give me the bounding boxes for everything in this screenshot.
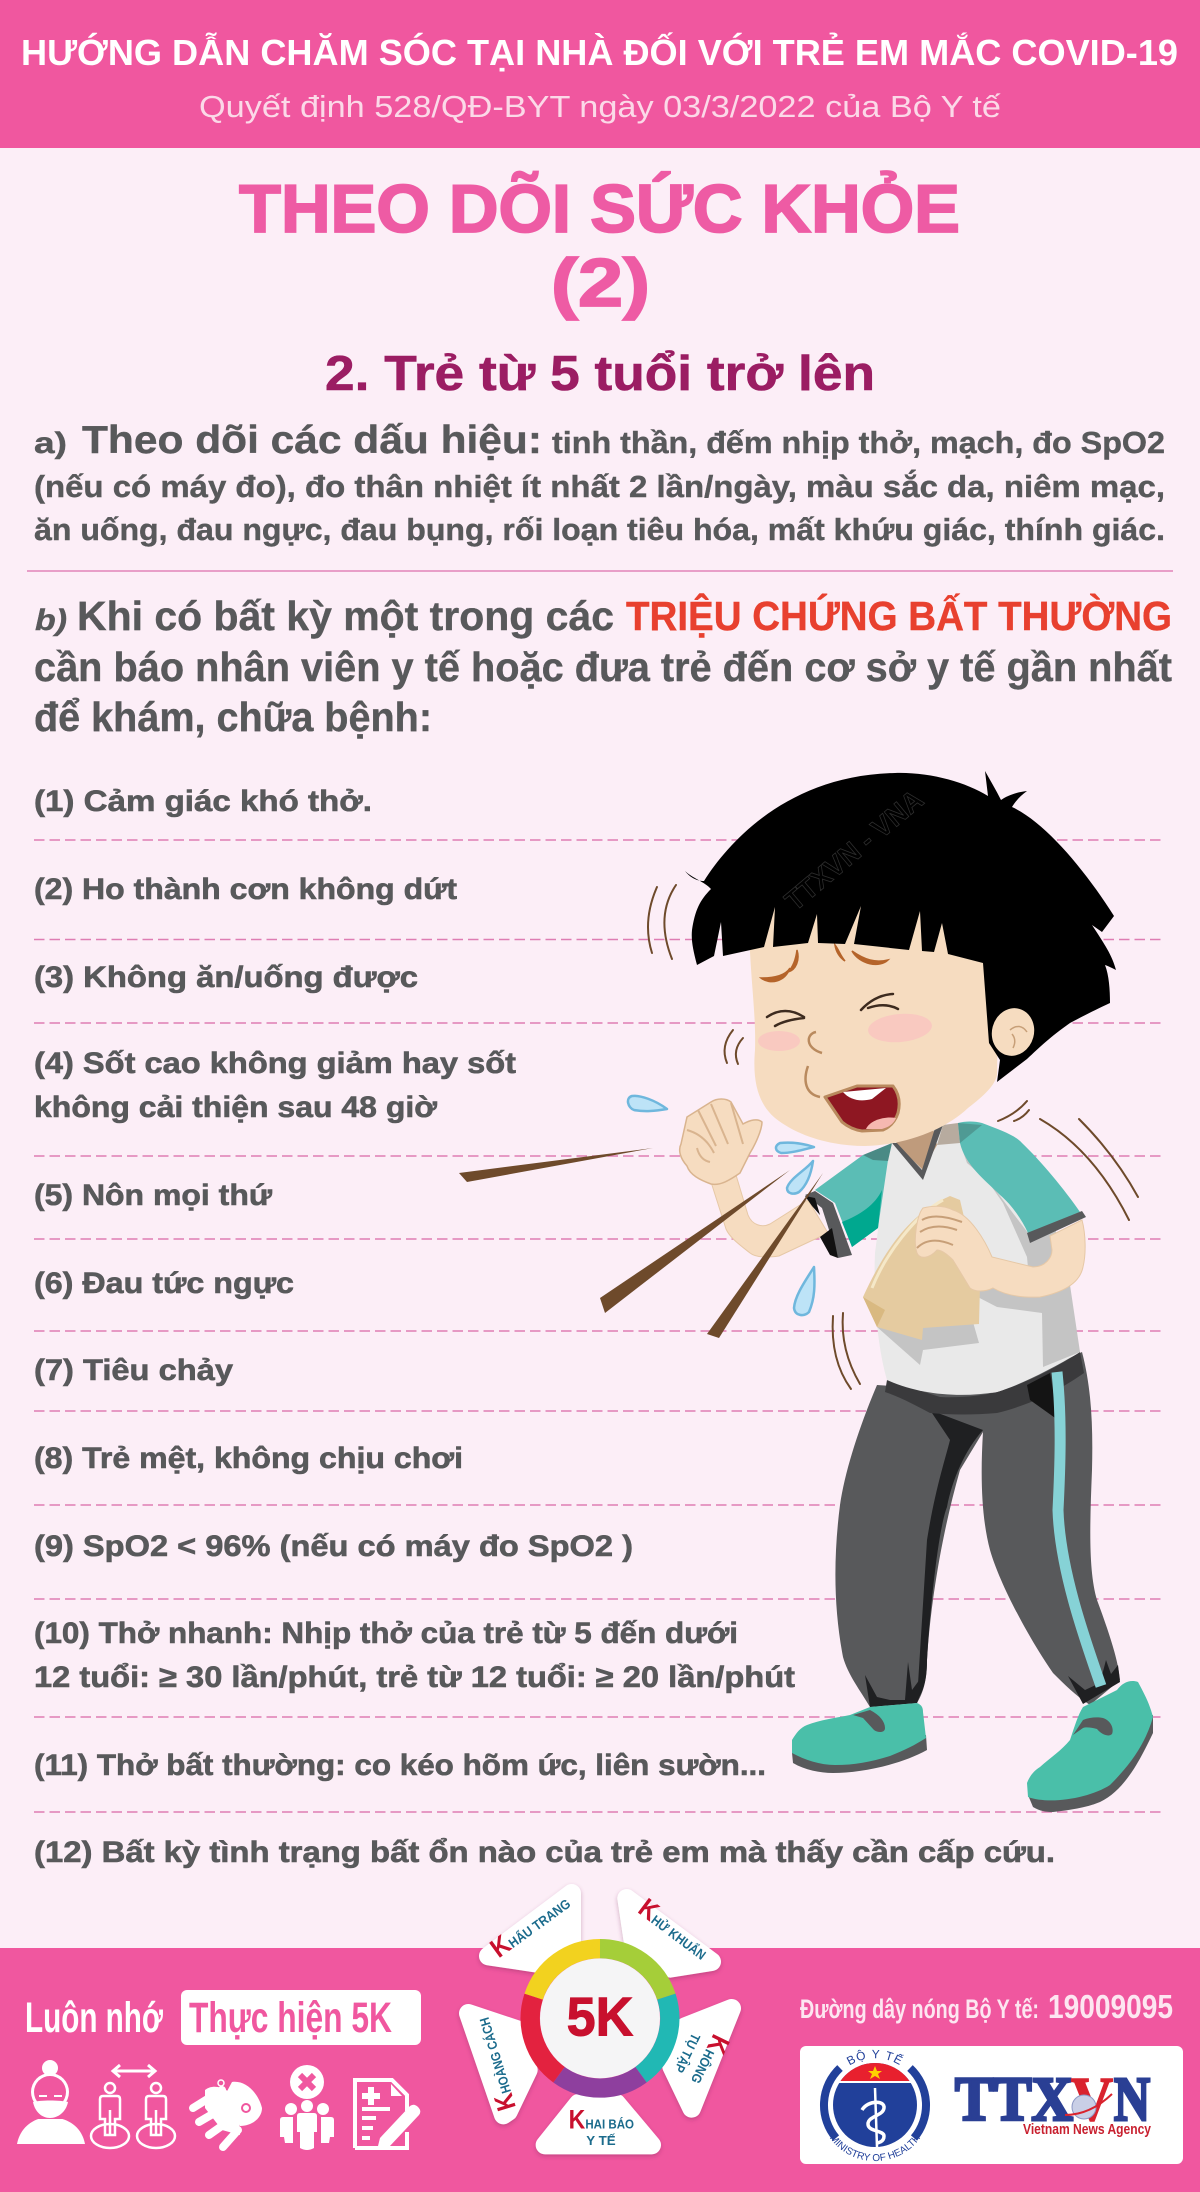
left shoe [792,1703,927,1773]
hotline: Đường dây nóng Bộ Y tế: [800,1994,1039,2024]
petal labels: KHÔNG [685,2030,736,2091]
symptom list: (8) Trẻ mệt, không chịu chơi [34,1442,463,1475]
head [750,900,1000,1146]
header subtitle: Quyết định 528/QĐ-BYT ngày 03/3/2022 của Bộ Y tế [199,89,1001,124]
symptom list [34,785,1055,1869]
icon: health declaration form [355,2080,420,2150]
footer band [0,1948,1200,2192]
TTXVN logo: TTX [955,2066,1073,2134]
cough streaks [459,1148,823,1338]
paragraph b: abnormal symptoms: cần báo nhân viên y tế hoặc đưa trẻ đến cơ sở y tế gần nhất [34,644,1172,690]
header band [0,0,1200,148]
TTXVN logo [955,2066,1152,2138]
left cuff [805,1191,852,1258]
towel shadow [877,1322,979,1365]
reminder pill: Thực hiện 5K [189,1994,392,2042]
hair [685,771,1116,1082]
petal labels: KHỬ KHUẨN [633,1892,716,1965]
paragraph a: signs to monitor: Theo dõi các dấu hiệu: [82,419,542,462]
ring [530,1949,670,2088]
symptom list: (7) Tiêu chảy [34,1354,233,1387]
symptom list: không cải thiện sau 48 giờ [34,1091,438,1124]
closed eyes [767,994,898,1026]
motion lines [648,885,1138,1389]
eyebrows [761,945,888,982]
section heading: 2. Trẻ từ 5 tuổi trở lên [325,347,875,401]
mouth [825,1086,899,1131]
illustration: coughing boy [459,771,1153,1812]
watermark on hair: TTXVN - VNA [779,784,929,917]
symptom list: (6) Đau tức ngực [34,1267,294,1300]
trousers [835,1352,1120,1707]
paragraph a: signs to monitor: a) [34,427,67,460]
logo panel [800,2046,1183,2164]
symptom list: (4) Sốt cao không giảm hay sốt [34,1047,516,1080]
shirt [815,1122,1086,1395]
petal labels: Y TẾ [586,2133,616,2148]
petal labels [465,1886,736,2148]
cheeks [758,1031,800,1051]
petals [468,1893,732,2145]
sleeves [958,1122,1080,1233]
reminder text: Luôn nhớ [25,1994,163,2042]
main title: (2) [551,245,650,321]
symptom list: 12 tuổi: ≥ 30 lần/phút, trẻ từ 12 tuổi: ≥ 20 lần/phút [34,1661,795,1694]
icon: masked person [17,2060,85,2144]
ear [987,1003,1039,1061]
5K diagram [465,1886,736,2148]
trouser stripe [1057,1372,1101,1686]
teeth [843,1088,886,1100]
tongue [866,1117,896,1129]
symptom list: (9) SpO2 < 96% (nếu có máy đo SpO2 ) [34,1530,633,1563]
hotline: 19009095 [1048,1988,1173,2025]
towel [863,1196,980,1340]
symptom list: (12) Bất kỳ tình trạng bất ổn nào của trẻ em mà thấy cần cấp cứu. [34,1836,1055,1869]
Ministry of Health logo [820,2050,930,2162]
symptom list: (5) Nôn mọi thứ [34,1179,272,1212]
petal labels: KHẨU TRANG [485,1886,575,1964]
petal labels: KHAI BÁO [569,2104,634,2134]
left arm [711,1175,852,1258]
paragraph a: signs to monitor: tinh thần, đếm nhịp thở, mạch, đo SpO2 [552,425,1165,460]
header title: HƯỚNG DẪN CHĂM SÓC TẠI NHÀ ĐỐI VỚI TRẺ EM MẮC COVID-19 [21,31,1178,73]
symptom list: (1) Cảm giác khó thở. [34,785,372,818]
nose [809,1032,822,1053]
paragraph b: abnormal symptoms [34,593,1172,740]
paragraph b: abnormal symptoms: TRIỆU CHỨNG BẤT THƯỜNG [626,593,1172,639]
TTXVN logo: V [1071,2066,1113,2134]
right arm and hand [915,1206,1085,1297]
paragraph a: signs to monitor: ăn uống, đau ngực, đau bụng, rối loạn tiêu hóa, mất khứu giác, thính giác. [34,512,1165,547]
symptom list: (10) Thở nhanh: Nhịp thở của trẻ từ 5 đến dưới [34,1617,738,1650]
icon: no gathering [280,2065,334,2150]
lip crease [806,1066,820,1097]
symptom list: (2) Ho thành cơn không dứt [34,873,457,906]
5K label: 5K [567,1986,634,2048]
paragraph a: signs to monitor: (nếu có máy đo), đo thân nhiệt ít nhất 2 lần/ngày, màu sắc da, niêm mạc, [34,468,1165,504]
paragraph a: signs to monitor [34,419,1165,547]
main title: THEO DÕI SỨC KHỎE [239,170,960,247]
petal labels: TỤ TẬP [671,2031,703,2075]
droplets [628,1096,814,1315]
Ministry of Health logo: BỘ Y TẾ [846,2050,904,2065]
icon: distancing [91,2065,175,2148]
petal labels: KHOÀNG CÁCH [465,2015,522,2114]
icon: hand washing [193,2080,262,2147]
TTXVN logo: N [1114,2066,1150,2134]
Ministry of Health logo: MINISTRY OF HEALTH [830,2138,920,2162]
right shoe [1027,1681,1153,1812]
symptom list: (3) Không ăn/uống được [34,961,418,994]
paragraph b: abnormal symptoms: để khám, chữa bệnh: [34,694,432,740]
paragraph b: abnormal symptoms: b) [35,604,67,637]
neck and collar [892,1125,943,1180]
fist [680,1099,762,1184]
main title [239,170,960,321]
TTXVN logo: Vietnam News Agency [1023,2121,1152,2138]
paragraph b: abnormal symptoms: Khi có bất kỳ một trong các [77,593,614,639]
symptom list: (11) Thở bất thường: co kéo hõm ức, liên sườn... [34,1749,766,1782]
